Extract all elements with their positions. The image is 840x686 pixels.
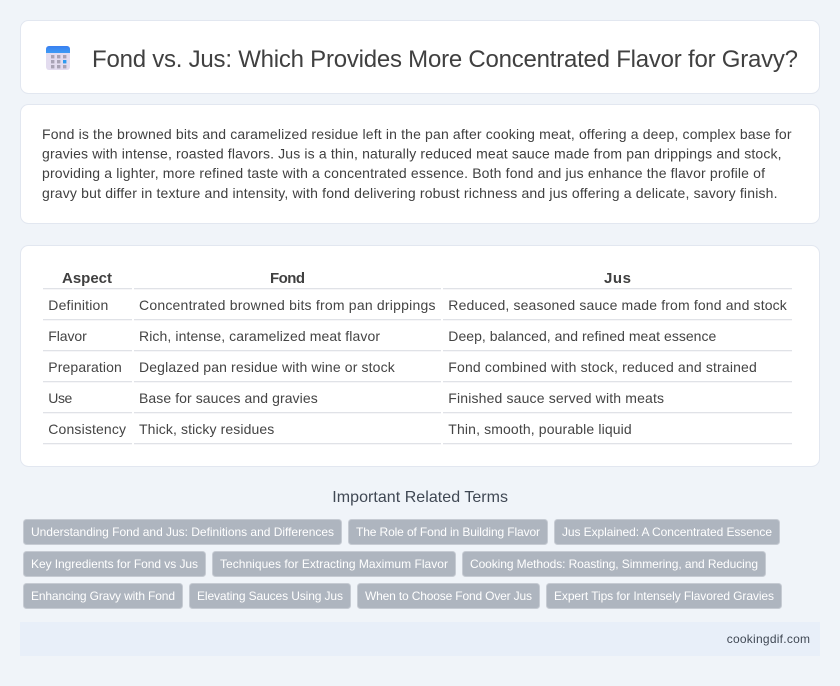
tag [358, 584, 540, 608]
tag [554, 520, 780, 544]
tag [462, 552, 766, 576]
table row: preparation: Preparation [48, 359, 122, 375]
tag: Expert Tips for Intensely Flavored Gravies [554, 589, 774, 603]
footer [20, 622, 820, 656]
table row: definition: Reduced, seasoned sauce made from fond and stock [448, 297, 788, 313]
footer source text: cookingdif.com [727, 632, 810, 646]
heading: important related terms: Important Related Terms [332, 489, 508, 506]
table row: consistency: Thin, smooth, pourable liquid [448, 421, 632, 437]
text block: summary paragraph: gravy but differ in texture and intensity, with fond delivering robust richness and jus offering a delicate, savory finish. [42, 185, 778, 201]
panel: comparison table [20, 246, 820, 466]
table row: preparation: Fond combined with stock, reduced and strained [448, 359, 757, 375]
table row: flavor: Rich, intense, caramelized meat flavor [139, 328, 380, 344]
table row: flavor: Flavor [48, 328, 87, 344]
table row: use: Finished sauce served with meats [448, 390, 664, 406]
text block: summary paragraph: providing a lighter, more refined taste with a concentrated essence. Both fond and jus enhance the flavor profile of [42, 165, 765, 181]
tag [212, 552, 456, 576]
tag: When to Choose Fond Over Jus [365, 589, 532, 603]
table row: preparation: Deglazed pan residue with wine or stock [139, 359, 396, 375]
table header: Aspect [62, 270, 112, 287]
title: Fond vs. Jus: Which Provides More Concentrated Flavor for Gravy? [92, 46, 798, 73]
tag: Elevating Sauces Using Jus [197, 589, 343, 603]
tag [24, 520, 342, 544]
tag: Understanding Fond and Jus: Definitions and Differences [31, 525, 334, 539]
table row: preparation [48, 359, 757, 375]
table row: use: Use [48, 390, 73, 406]
tag [24, 584, 182, 608]
tag [348, 520, 548, 544]
tag: Techniques for Extracting Maximum Flavor [220, 557, 448, 571]
table row: consistency: Consistency [48, 421, 126, 437]
table row: consistency: Thick, sticky residues [139, 421, 274, 437]
table row: consistency [48, 421, 632, 437]
tag list: related terms [24, 520, 782, 608]
icon: calendar grid [46, 46, 70, 70]
text block: summary paragraph: gravies with intense, roasted flavors. Jus is a thin, naturally reduced meat sauce made from pan drippings and stock, [42, 146, 782, 162]
table row: flavor [48, 328, 717, 344]
text block: summary paragraph [42, 126, 792, 201]
table header: Fond [270, 270, 305, 287]
table header [62, 270, 631, 287]
tag: Enhancing Gravy with Fond [31, 589, 175, 603]
table header: Jus [604, 270, 631, 287]
tag [190, 584, 350, 608]
tag [546, 584, 782, 608]
tag: Key Ingredients for Fond vs Jus [31, 557, 198, 571]
table row: definition: Definition [48, 297, 108, 313]
tag: Jus Explained: A Concentrated Essence [562, 525, 772, 539]
panel: title header [20, 20, 820, 94]
table row: use: Base for sauces and gravies [139, 390, 318, 406]
text block: summary paragraph: Fond is the browned bits and caramelized residue left in the pan after cooking meat, offering a deep, complex base for [42, 126, 792, 142]
tag [24, 552, 206, 576]
table row: definition [48, 297, 788, 313]
panel: introduction text [20, 104, 820, 224]
table row: flavor: Deep, balanced, and refined meat essence [448, 328, 717, 344]
tag: Cooking Methods: Roasting, Simmering, and Reducing [470, 557, 758, 571]
table row: use [48, 390, 664, 406]
tag: The Role of Fond in Building Flavor [356, 525, 540, 539]
table row: definition: Concentrated browned bits from pan drippings [139, 297, 436, 313]
